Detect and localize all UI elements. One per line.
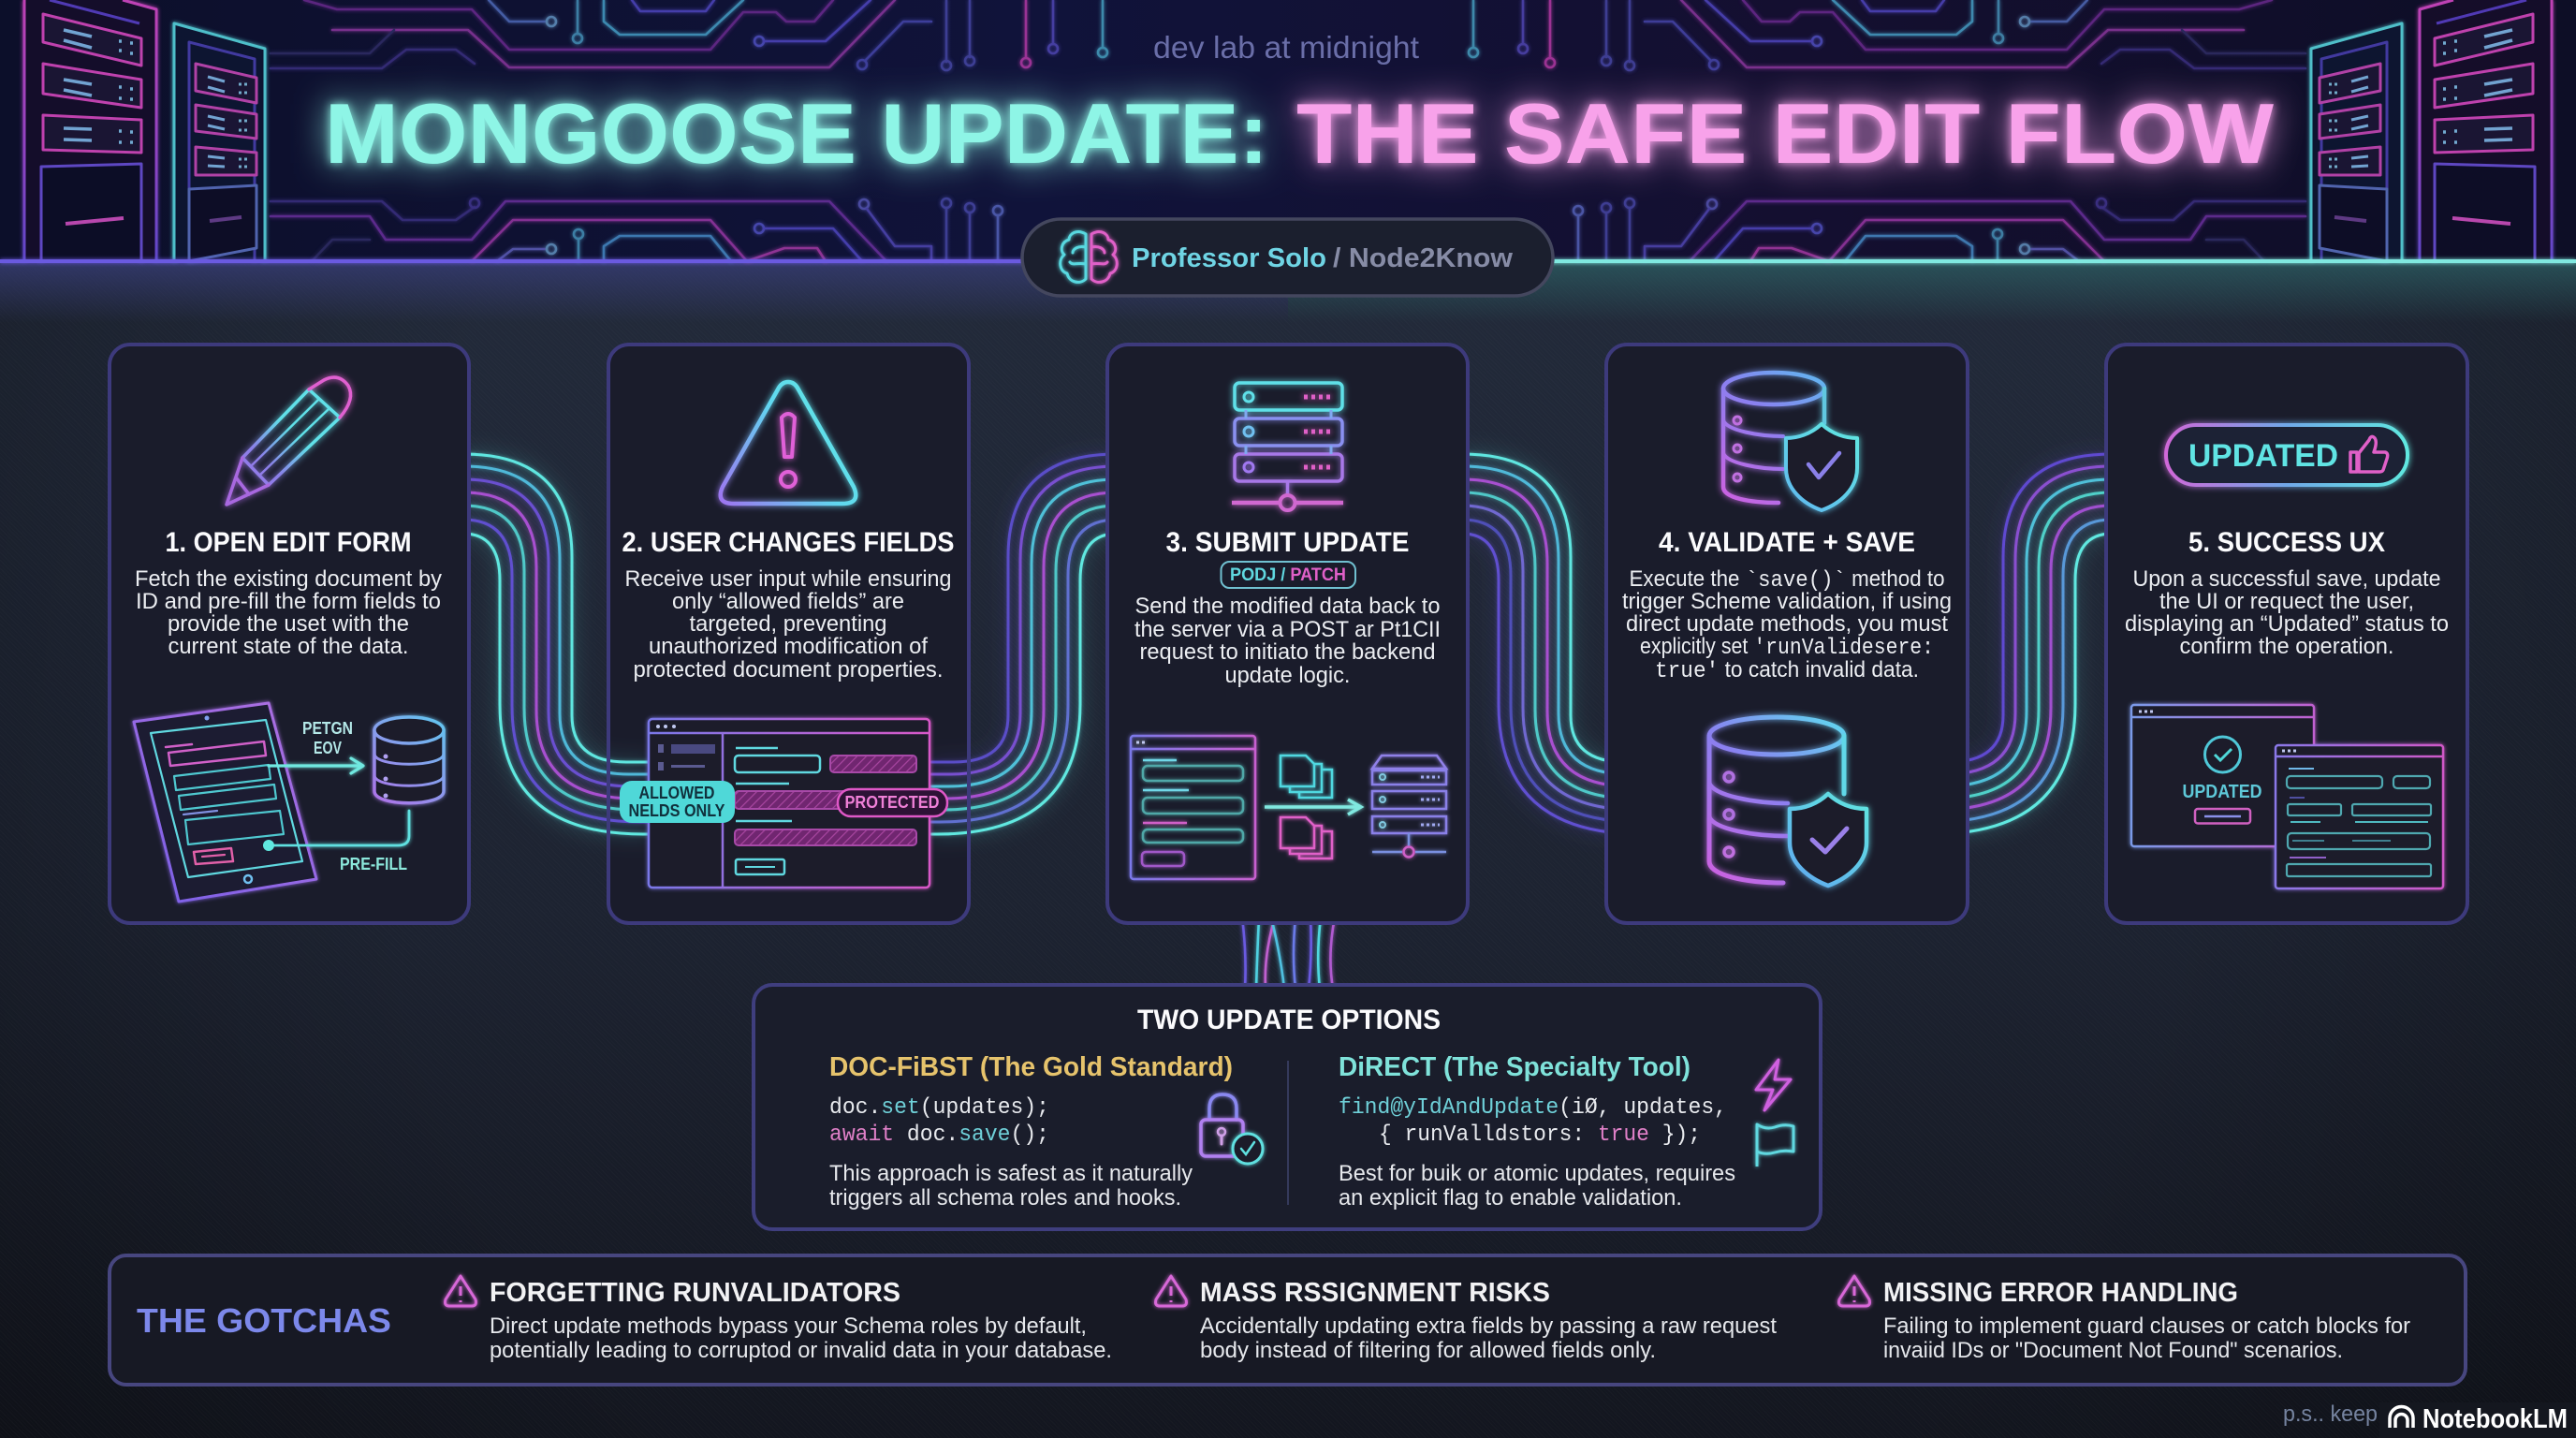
description: true' to catch invalid data.	[1655, 657, 1919, 684]
heading: 4. VALIDATE + SAVE	[1659, 527, 1915, 558]
brand name: / Node2Know	[1333, 243, 1513, 273]
description: explicitly set 'runValidesere:	[1640, 634, 1934, 661]
description: current state of the data.	[168, 634, 408, 659]
badge: protected: PROTECTED	[844, 793, 940, 812]
icon: lock with check	[1201, 1094, 1263, 1164]
option: direct: DiRECT (The Specialty Tool)	[1339, 1052, 1690, 1082]
icon: server stack	[1232, 383, 1343, 510]
circuit traces right	[1469, 0, 2305, 261]
gotcha: forgetting runvalidators: potentially leading to corruptod or invalid data in your database.	[490, 1338, 1112, 1363]
badge: allowed fields only: ALLOWED	[638, 784, 715, 802]
description: confirm the operation.	[2179, 634, 2394, 659]
gotcha: missing error handling: MISSING ERROR HANDLING	[1883, 1278, 2238, 1308]
title: MONGOOSE UPDATE:	[325, 87, 1268, 182]
illustration: form to server	[1131, 736, 1446, 879]
description: update logic.	[1224, 663, 1350, 688]
description	[1622, 566, 1952, 684]
header banner background	[0, 0, 2576, 323]
description: displaying an “Updated” status to	[2125, 611, 2449, 637]
description	[625, 566, 951, 682]
description: trigger Scheme validation, if using	[1622, 589, 1952, 614]
gotcha: mass assignment risks: MASS RSSIGNMENT RISKS	[1200, 1278, 1550, 1308]
card background for step 2	[608, 345, 969, 923]
description: provide the uset with the	[168, 611, 409, 637]
badge: allowed fields only: NELDS ONLY	[629, 801, 724, 820]
method badge: PODJ / PATCH	[1230, 565, 1346, 585]
panel: two update options	[754, 985, 1821, 1229]
description: the server via a POST ar Pt1CII	[1134, 617, 1441, 642]
author pill	[1022, 219, 1553, 296]
option: doc-first: DOC-FiBST (The Gold Standard)	[829, 1052, 1233, 1082]
gotcha: missing error handling: Failing to implement guard clauses or catch blocks for	[1883, 1313, 2410, 1339]
gotcha: missing error handling	[1838, 1276, 2410, 1363]
option: doc-first: await doc.save();	[829, 1123, 1049, 1148]
server racks left	[24, 0, 265, 261]
icon: pencil	[227, 377, 351, 505]
icon: updated pill	[2166, 425, 2408, 485]
label: fetch: PETGN	[302, 719, 353, 738]
heading: 1. OPEN EDIT FORM	[165, 527, 412, 558]
description: only “allowed fields” are	[672, 589, 904, 614]
option: doc-first	[829, 1052, 1233, 1211]
illustration: large database with shield	[1709, 717, 1866, 886]
option: direct	[1339, 1052, 1735, 1211]
icon: lightning bolt	[1756, 1060, 1791, 1110]
description: protected document properties.	[633, 657, 944, 682]
description	[2125, 566, 2449, 659]
description: targeted, preventing	[689, 611, 887, 637]
option: doc-first: This approach is safest as it naturally	[829, 1161, 1193, 1186]
gotcha: missing error handling: invaiid IDs or "Document Not Found" scenarios.	[1883, 1338, 2343, 1363]
icon: updated pill: UPDATED	[2188, 438, 2338, 474]
heading: 2. USER CHANGES FIELDS	[622, 527, 955, 558]
label: the gotchas: THE GOTCHAS	[137, 1301, 391, 1340]
illustration: form window	[649, 719, 929, 888]
description: direct update methods, you must	[1626, 611, 1948, 637]
option: direct: an explicit flag to enable validation.	[1339, 1185, 1682, 1211]
heading: 3. SUBMIT UPDATE	[1166, 527, 1410, 558]
option: doc-first: doc.set(updates);	[829, 1095, 1049, 1121]
gotcha: mass assignment risks: Accidentally updating extra fields by passing a raw request	[1200, 1313, 1777, 1339]
icon: brain	[1061, 232, 1117, 282]
panel: step 3 submit update	[1107, 345, 1468, 923]
gotcha: mass assignment risks: body instead of filtering for allowed fields only.	[1200, 1338, 1656, 1363]
title: THE SAFE EDIT FLOW	[1296, 87, 2274, 182]
description: the UI or requect the user,	[2159, 589, 2414, 614]
server racks right	[2311, 0, 2552, 261]
description: Fetch the existing document by	[135, 566, 442, 592]
description: Send the modified data back to	[1134, 594, 1440, 619]
gotcha: forgetting runvalidators: FORGETTING RUNVALIDATORS	[490, 1278, 900, 1308]
gotcha: forgetting runvalidators	[446, 1276, 1112, 1363]
panel: the gotchas	[110, 1255, 2466, 1385]
heading: 5. SUCCESS UX	[2188, 527, 2385, 558]
option: direct: find@yIdAndUpdate(iØ, updates,	[1339, 1095, 1727, 1121]
badge: allowed fields only	[620, 781, 735, 823]
label: updated: UPDATED	[2183, 782, 2261, 802]
option: doc-first: triggers all schema roles and hooks.	[829, 1185, 1181, 1211]
badge: protected	[838, 789, 947, 816]
option: direct: { runValldstors: true });	[1379, 1123, 1701, 1148]
description	[1134, 594, 1441, 688]
description: ID and pre-fill the form fields to	[136, 589, 441, 614]
gotcha: mass assignment risks	[1155, 1276, 1777, 1363]
description: request to initiato the backend	[1140, 639, 1436, 665]
icon: database with shield	[1723, 373, 1857, 510]
flow ribbon: step 2 to 3	[931, 454, 1117, 834]
method badge	[1221, 562, 1355, 588]
label: pre-fill: PRE-FILL	[340, 855, 407, 873]
panel: step 2 user changes fields	[608, 345, 969, 923]
illustration: tablet fetch and pre-fill	[134, 703, 444, 902]
description: Upon a successful save, update	[2132, 566, 2441, 592]
author name: Professor Solo	[1132, 243, 1326, 273]
description: Receive user input while ensuring	[625, 566, 951, 592]
panel: step 4 validate and save	[1606, 345, 1968, 923]
icon: warning triangle	[721, 382, 856, 504]
panel: step 5 success ux	[2106, 345, 2467, 923]
label: eov: EOV	[314, 739, 342, 757]
subtitle: dev lab at midnight: dev lab at midnight	[1153, 30, 1419, 65]
divider	[1287, 1061, 1289, 1205]
circuit traces left	[271, 0, 1107, 261]
description	[135, 566, 442, 659]
header floor line	[0, 259, 2576, 263]
flow ribbon: step 3 to 4	[1462, 454, 1647, 834]
option: direct: Best for buik or atomic updates, requires	[1339, 1161, 1735, 1186]
illustration: updated windows	[2131, 705, 2443, 888]
title	[325, 87, 2274, 182]
icon: flag	[1757, 1124, 1793, 1167]
connector to options panel	[1242, 917, 1335, 989]
flow ribbon: step 1 to 2	[463, 454, 649, 834]
heading: TWO UPDATE OPTIONS	[1137, 1005, 1441, 1035]
description: Execute the `save()` method to	[1629, 566, 1945, 594]
footer note: p.s.. keep	[2283, 1401, 2378, 1427]
description: unauthorized modification of	[649, 634, 928, 659]
gotcha: forgetting runvalidators: Direct update methods bypass your Schema roles by default,	[490, 1313, 1087, 1339]
flow ribbon: step 4 to 5	[1926, 454, 2112, 834]
panel: step 1 open edit form	[110, 345, 469, 923]
notebooklm mark	[2379, 1402, 2576, 1438]
